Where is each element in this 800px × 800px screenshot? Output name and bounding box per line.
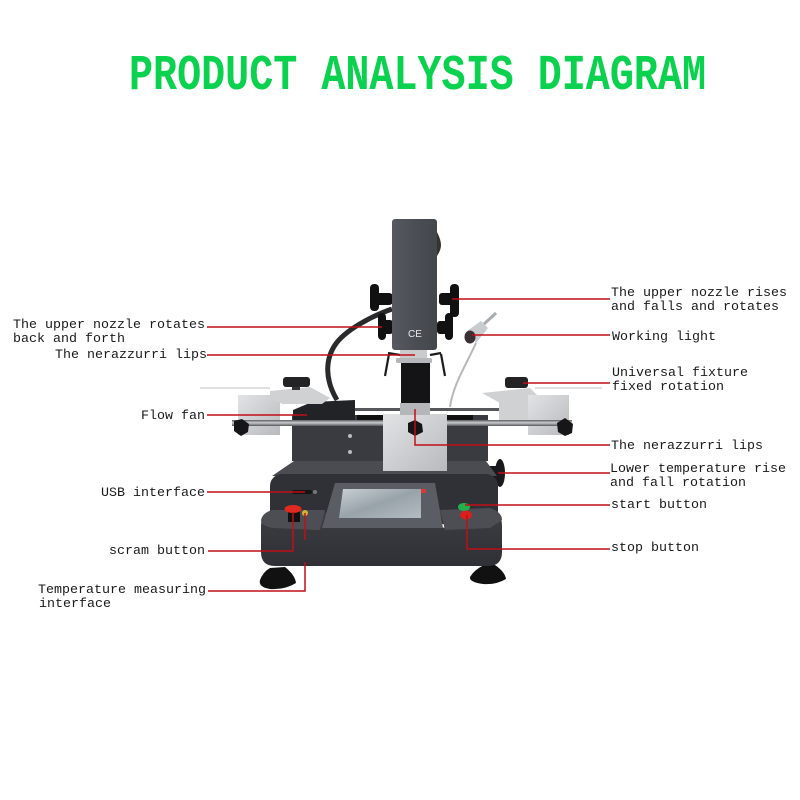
label: nerazzurri lips right: The nerazzurri lips xyxy=(611,439,763,454)
rear knob xyxy=(437,232,441,256)
lower temperature knob xyxy=(486,459,505,487)
label: upper nozzle rotates: The upper nozzle rotates xyxy=(13,318,205,333)
label: scram button: scram button xyxy=(109,544,205,559)
label: flow fan: Flow fan xyxy=(141,409,205,424)
leader lines xyxy=(207,299,610,591)
label: working light: Working light xyxy=(612,330,716,345)
feet xyxy=(260,565,506,589)
upper nozzle head: CE xyxy=(408,329,422,340)
label: nerazzurri lips left: The nerazzurri lips xyxy=(55,348,207,363)
flow fan box xyxy=(293,400,355,421)
upper nozzle head xyxy=(392,219,437,350)
start button xyxy=(458,503,470,511)
upper guide rod xyxy=(355,408,501,411)
right fixture xyxy=(482,377,602,435)
main guide rod xyxy=(232,420,572,426)
label: lower temperature: Lower temperature rise xyxy=(610,462,786,477)
lower housing xyxy=(292,415,488,461)
upper base body xyxy=(270,474,498,524)
nozzle collar xyxy=(396,350,432,363)
label: upper nozzle rises: and falls and rotates xyxy=(611,300,779,315)
panel indicator xyxy=(421,489,426,493)
label: stop button: stop button xyxy=(611,541,699,556)
nozzle clamp arms xyxy=(385,353,445,376)
label: temperature measuring interface: interface xyxy=(39,597,111,612)
label: lower temperature: and fall rotation xyxy=(610,476,746,491)
display screen xyxy=(339,489,421,518)
left fixture xyxy=(200,377,330,435)
label: temperature measuring interface: Temperature measuring xyxy=(38,583,206,598)
stop button xyxy=(460,510,472,520)
temperature port xyxy=(302,510,308,516)
lower base body xyxy=(261,510,502,566)
USB port xyxy=(292,490,317,494)
column xyxy=(401,363,430,404)
label: USB interface: USB interface xyxy=(101,486,205,501)
working lamp xyxy=(464,313,496,344)
control panel xyxy=(322,483,443,528)
center silver bracket xyxy=(383,403,447,471)
product: rework station xyxy=(200,219,602,589)
label: upper nozzle rotates: back and forth xyxy=(13,332,125,347)
label: universal fixture: fixed rotation xyxy=(612,380,724,395)
label: universal fixture: Universal fixture xyxy=(612,366,748,381)
button shelves xyxy=(261,508,502,530)
fixture knobs xyxy=(234,418,573,436)
label: upper nozzle rises: The upper nozzle rises xyxy=(611,286,787,301)
scram button xyxy=(284,505,302,522)
sloped top of base xyxy=(272,461,497,476)
label: start button: start button xyxy=(611,498,707,513)
hot air hose xyxy=(328,309,392,400)
upper head knobs xyxy=(370,284,459,340)
lamp gooseneck xyxy=(450,343,476,407)
